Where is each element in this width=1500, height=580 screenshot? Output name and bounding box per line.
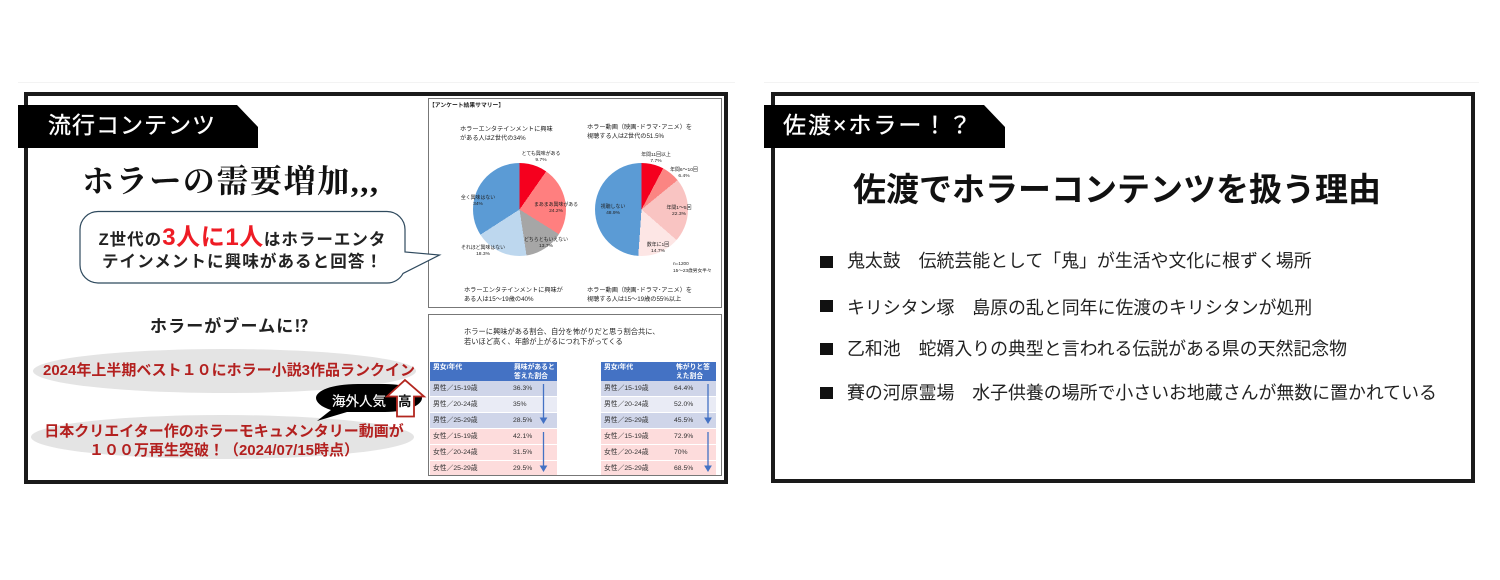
table: fear: 45.5% xyxy=(674,417,693,424)
arrow label: high: 高 xyxy=(398,394,412,409)
table: interest: 男性／15-19歳 xyxy=(433,385,478,392)
table: interest: 31.5% xyxy=(513,449,532,456)
takeaway left xyxy=(464,286,563,302)
table: interest: 女性／15-19歳 xyxy=(433,433,478,440)
reason: Sai no Kawara: 賽の河原霊場 水子供養の場所で小さいお地蔵さんが無数に置かれている xyxy=(847,383,1437,403)
pie caption left: がある人はZ世代の34% xyxy=(460,134,526,142)
heading: rising demand for horror: ホラーの需要増加,,, xyxy=(82,163,380,199)
table: fear: 64.4% xyxy=(674,385,693,392)
pie caption right: ホラー動画（映画･ドラマ･アニメ）を xyxy=(587,124,692,131)
pie labels right: 48.9% xyxy=(606,211,620,216)
pie labels left xyxy=(461,150,578,257)
pie chart: horror video viewing xyxy=(595,163,688,256)
table: interest: 男性／25-29歳 xyxy=(433,417,478,424)
takeaway left: ホラーエンタテインメントに興味が xyxy=(464,287,563,294)
panel: trending content xyxy=(18,82,735,490)
tag: trending content xyxy=(18,105,258,148)
table: fear: えた割合 xyxy=(676,372,703,380)
takeaway right: ホラー動画（映画･ドラマ･アニメ）を xyxy=(587,287,692,294)
table: interest: 女性／25-29歳 xyxy=(433,465,478,472)
pie labels right: 視聴しない xyxy=(601,205,625,210)
icon: up arrow high xyxy=(385,378,426,418)
table: interest: 35% xyxy=(513,401,527,408)
takeaway left: ある人は15～19歳の40% xyxy=(464,296,533,302)
table: fear: 男性／15-19歳 xyxy=(604,385,649,392)
callout text: テインメントに興味があると回答！ xyxy=(102,253,383,271)
pie labels left: どちらともいえない xyxy=(524,238,568,243)
pie chart: horror interest xyxy=(473,163,566,256)
tag: Sado x horror xyxy=(764,105,1005,148)
pie labels left: 18.3% xyxy=(476,252,490,257)
table: interest: 答えた割合 xyxy=(514,372,548,380)
tag: trending content: 流行コンテンツ xyxy=(48,112,216,138)
table: fear: 男女/年代 xyxy=(604,364,633,371)
reason: oni drum: 鬼太鼓 伝統芸能として「鬼」が生活や文化に根ずく場所 xyxy=(847,251,1312,271)
takeaway right xyxy=(587,286,692,302)
sample note: n=1200 xyxy=(673,261,689,266)
pie labels left: 全く興味はない xyxy=(461,196,495,201)
table: fear: 女性／20-24歳 xyxy=(604,449,649,456)
table: fear: 52.0% xyxy=(674,401,693,408)
heading: reasons for horror in Sado: 佐渡でホラーコンテンツを扱う理由 xyxy=(853,171,1381,208)
pie labels left: 34% xyxy=(473,202,483,207)
table: interest: 28.5% xyxy=(513,417,532,424)
callout: one in three Gen Z xyxy=(79,210,442,284)
pie labels right: 年間6～10回 xyxy=(670,168,698,173)
table: fear: 68.5% xyxy=(674,465,693,472)
panel: survey summary xyxy=(428,98,722,308)
pie caption left: ホラーエンタテインメントに興味 xyxy=(460,126,553,133)
pie labels left: 24.2% xyxy=(549,209,563,214)
ellipse: novel ranking: 2024年上半期ベスト１０にホラー小説3作品ランクイン xyxy=(43,362,415,379)
tag: Sado x horror: 佐渡×ホラー！？ xyxy=(783,112,973,138)
table: fear: 女性／15-19歳 xyxy=(604,433,649,440)
pie labels left: 9.7% xyxy=(535,158,547,163)
sample note xyxy=(673,261,712,273)
table: interest: 42.1% xyxy=(513,433,532,440)
tables heading xyxy=(464,327,660,346)
table: interest: 男女/年代 xyxy=(433,364,462,371)
pie labels left: 13.7% xyxy=(539,244,553,249)
pie labels right xyxy=(600,152,698,254)
trend arrows xyxy=(540,384,712,472)
panel frame xyxy=(771,92,1475,483)
callout text xyxy=(99,224,386,271)
speech bubble text: 海外人気 xyxy=(332,394,386,409)
heading: horror boom: ホラーがブームに⁉ xyxy=(150,317,310,336)
pie labels right: 年間11回以上 xyxy=(641,153,671,158)
table: interest: 興味があると xyxy=(514,364,555,371)
table: fear: 男性／20-24歳 xyxy=(604,401,649,408)
pie labels left: まあまあ興味がある xyxy=(534,203,578,208)
pie labels right: 22.3% xyxy=(672,212,686,217)
pie labels right: 7.7% xyxy=(650,159,662,164)
pie caption right: 視聴する人はZ世代の51.5% xyxy=(587,132,664,140)
pie caption right xyxy=(587,124,692,140)
ellipse: mockumentary views xyxy=(31,415,414,459)
pie labels left: とても興味がある xyxy=(522,152,560,157)
pie labels right: 数年に1回 xyxy=(647,243,669,248)
table: fear: 怖がりと答 xyxy=(676,364,710,371)
pie labels left: それほど興味はない xyxy=(461,246,505,251)
pie labels right: 6.4% xyxy=(678,174,690,179)
table: interest: 男性／20-24歳 xyxy=(433,401,478,408)
panel frame xyxy=(24,92,728,484)
reason: Otowa pond: 乙和池 蛇婿入りの典型と言われる伝説がある県の天然記念物 xyxy=(847,339,1347,359)
table: interest: 29.5% xyxy=(513,465,532,472)
panel: interest and fear tables xyxy=(428,314,722,476)
tables heading: ホラーに興味がある割合、自分を怖がりだと思う割合共に、 xyxy=(464,327,660,336)
ellipse: novel ranking xyxy=(33,349,416,393)
callout text: Z世代の3人に1人はホラーエンタ xyxy=(99,224,386,251)
table: fear: 女性／25-29歳 xyxy=(604,465,649,472)
table: fear xyxy=(601,362,716,475)
tables heading: 若いほど高く、年齢が上がるにつれ下がってくる xyxy=(464,337,623,346)
table: fear: 男性／25-29歳 xyxy=(604,417,649,424)
reason: Kirishitan mound: キリシタン塚 島原の乱と同年に佐渡のキリシタンが処刑 xyxy=(847,298,1312,318)
panel: why Sado xyxy=(764,82,1479,487)
table: interest: 36.3% xyxy=(513,385,532,392)
ellipse: mockumentary views: １００万再生突破！（2024/07/15時点） xyxy=(89,442,359,458)
sample note: 15～23歳男女半々 xyxy=(673,268,712,273)
table: interest xyxy=(430,362,557,475)
takeaway right: 視聴する人は15～19歳の55%以上 xyxy=(587,296,681,302)
table: fear: 72.9% xyxy=(674,433,693,440)
pie labels right: 年間1～5回 xyxy=(666,206,692,211)
pie labels right: 14.7% xyxy=(651,249,665,254)
pie caption left xyxy=(460,126,553,142)
list: reasons xyxy=(820,251,1437,403)
survey heading: 【アンケート結果サマリー】 xyxy=(429,103,504,109)
speech bubble: overseas popularity xyxy=(316,384,422,421)
table: fear: 70% xyxy=(674,449,688,456)
ellipse: mockumentary views: 日本クリエイター作のホラーモキュメンタリー動画が xyxy=(44,423,404,440)
table: interest: 女性／20-24歳 xyxy=(433,449,478,456)
